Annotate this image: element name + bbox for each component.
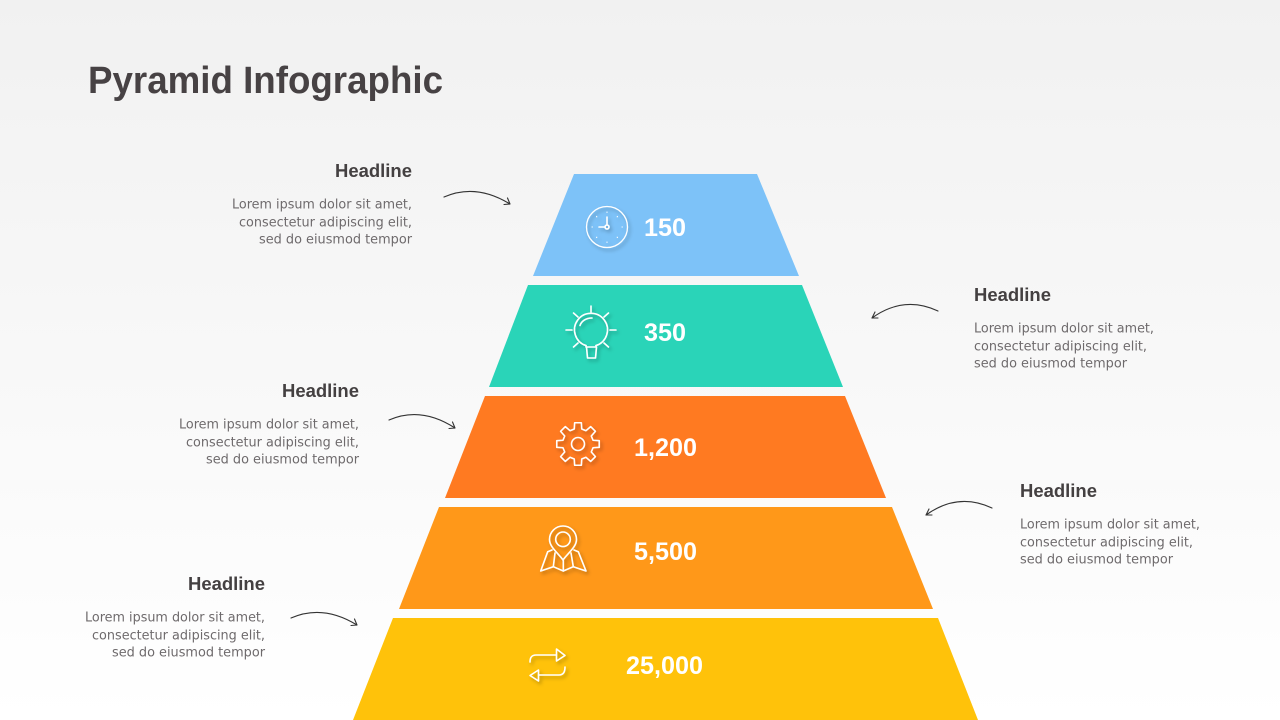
callout 1: top left [232,161,412,247]
arrow 2 [872,304,938,318]
value: 5,500: 5,500 [634,538,697,566]
callout 3: middle left: sed do eiusmod tempor [206,451,359,467]
tier 3: orange [445,396,886,498]
callout 2: right: Headline [974,285,1051,305]
tier 4: amber orange [399,507,933,609]
callout 2: right: consectetur adipiscing elit, [974,338,1147,354]
callout 2: right: sed do eiusmod tempor [974,355,1127,371]
callout 4: lower right: sed do eiusmod tempor [1020,551,1173,567]
tier 2: teal [489,285,843,387]
callout 3: middle left: Lorem ipsum dolor sit amet, [179,416,359,432]
arrow 1 [444,191,510,204]
callout 4: lower right [1020,481,1200,567]
callout 5: bottom left: sed do eiusmod tempor [112,644,265,660]
arrow 4 [926,501,992,515]
icon: light bulb [566,306,616,358]
callout 1: top left: Headline [335,161,412,181]
callout 2: right: Lorem ipsum dolor sit amet, [974,320,1154,336]
callout 2: right [974,285,1154,371]
value: 1,200: 1,200 [634,434,697,462]
callout 1: top left: Lorem ipsum dolor sit amet, [232,196,412,212]
tier 1: blue [533,174,799,276]
callout 4: lower right: Headline [1020,481,1097,501]
value: 150: 150 [644,214,686,242]
icon: repeat arrows [530,649,565,681]
callout 4: lower right: consectetur adipiscing elit, [1020,534,1193,550]
callout 4: lower right: Lorem ipsum dolor sit amet, [1020,516,1200,532]
value: 25,000: 25,000 [626,652,703,680]
arrow 3 [389,415,455,428]
callout 3: middle left: Headline [282,381,359,401]
callout 5: bottom left: consectetur adipiscing elit, [92,627,265,643]
callout 3: middle left: consectetur adipiscing elit, [186,434,359,450]
callout 1: top left: consectetur adipiscing elit, [239,214,412,230]
callout 5: bottom left [85,574,265,660]
icon: gear [557,423,599,465]
callout 3: middle left [179,381,359,467]
icon: map with pin [541,526,586,571]
callout 5: bottom left: Lorem ipsum dolor sit amet, [85,609,265,625]
arrow 5 [291,612,357,626]
title: Pyramid Infographic [88,60,443,102]
value: 350: 350 [644,319,686,347]
tier 5: yellow [353,618,978,720]
pyramid [353,174,978,720]
callout 1: top left: sed do eiusmod tempor [259,231,412,247]
icon: clock [586,206,628,248]
callout 5: bottom left: Headline [188,574,265,594]
